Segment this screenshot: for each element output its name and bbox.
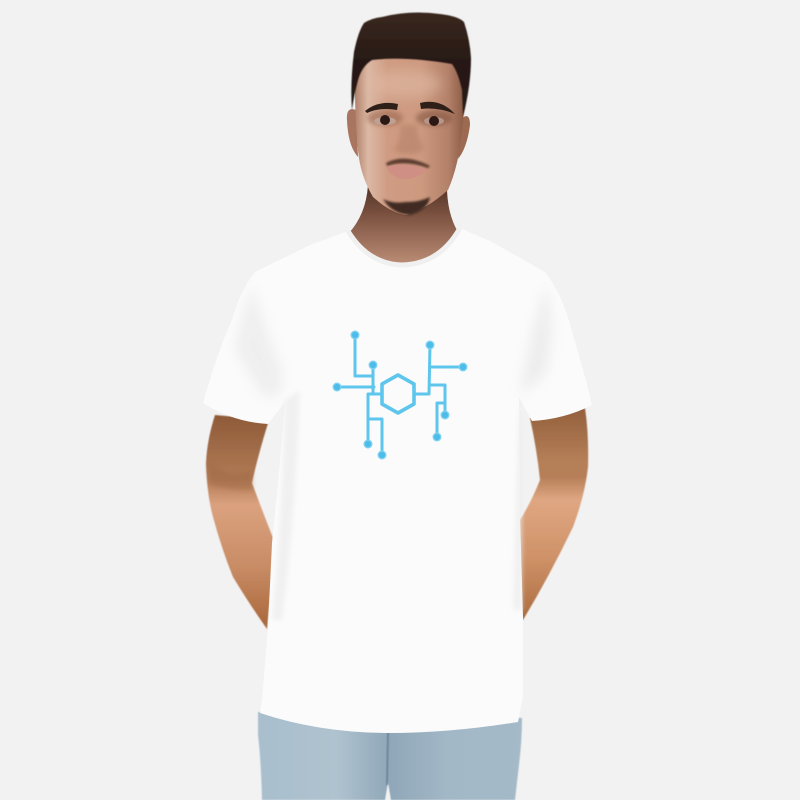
right eyebrow [420,102,455,114]
right arm [518,408,588,622]
left ear [347,109,358,157]
left eye [374,115,396,125]
collar [348,228,460,265]
t-shirt body and sleeves [203,228,592,733]
forehead highlight [366,70,442,98]
t-shirt [203,228,592,733]
circuit print [333,331,467,459]
goatee [383,197,430,215]
right eye socket shadow [416,110,452,126]
mustache [386,159,430,168]
traces right [414,345,463,437]
hair [351,13,471,117]
left eyebrow [365,103,398,113]
sleeve shading right [520,285,552,395]
neck [348,180,458,268]
left eye socket shadow [367,110,403,126]
right ear [458,116,470,159]
torso shading [272,390,522,620]
head [347,13,471,215]
terminal nodes [333,331,467,459]
sleeve shading left [235,285,282,397]
left arm [206,415,275,629]
central hexagon [382,375,414,413]
lips [386,165,428,179]
right eye [424,116,444,126]
traces left [337,335,382,455]
face [355,50,465,215]
nose [394,125,424,154]
jeans [258,712,522,800]
